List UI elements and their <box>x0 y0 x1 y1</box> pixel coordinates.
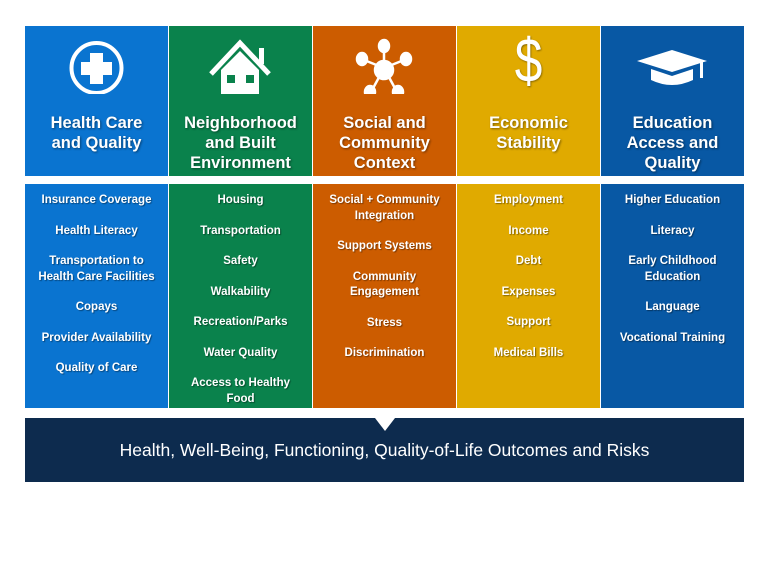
list: economic: Employment <box>494 194 563 206</box>
list: economic: Medical Bills <box>494 346 563 358</box>
title <box>489 114 570 154</box>
list: neighborhood: Access to Healthy <box>191 377 290 389</box>
list: education: Vocational Training <box>620 332 725 344</box>
list: social <box>313 184 456 408</box>
list: economic: Expenses <box>502 286 555 298</box>
list: social: Stress <box>367 316 402 328</box>
list: health care: Quality of Care <box>56 362 137 374</box>
list: health care: Insurance Coverage <box>42 194 151 206</box>
title <box>51 114 144 154</box>
title <box>339 114 432 172</box>
title: Social and <box>343 114 426 132</box>
list: education: Language <box>645 301 700 313</box>
list: social: Engagement <box>350 286 419 298</box>
title: Community <box>339 134 430 152</box>
list: health care: Transportation to <box>49 255 144 267</box>
outcome bar <box>25 418 744 482</box>
list: neighborhood: Food <box>226 392 255 404</box>
icon: network <box>356 38 412 94</box>
title: Neighborhood <box>184 114 297 132</box>
title: and Quality <box>52 134 141 152</box>
list: health care: Health Literacy <box>55 224 138 236</box>
header: social <box>313 26 456 176</box>
title <box>627 114 720 174</box>
list: social: Integration <box>355 210 414 222</box>
title: Access and <box>627 134 718 152</box>
title: Context <box>354 154 415 172</box>
list: education: Early Childhood <box>628 255 717 267</box>
list: neighborhood <box>169 184 312 408</box>
title: Stability <box>496 134 561 152</box>
list: neighborhood: Transportation <box>200 224 281 236</box>
list: neighborhood: Water Quality <box>204 346 277 358</box>
title <box>184 114 298 172</box>
list: neighborhood: Housing <box>218 194 264 206</box>
list: education: Higher Education <box>625 194 720 206</box>
icon: graduation cap <box>637 50 707 85</box>
list: education: Literacy <box>650 224 695 236</box>
arrow notch <box>375 418 395 431</box>
list: education <box>601 184 744 408</box>
list: social: Social + Community <box>329 194 440 206</box>
icon: dollar: $ <box>515 27 542 96</box>
list: economic: Support <box>506 316 551 328</box>
list: neighborhood: Walkability <box>211 286 270 298</box>
title: Health Care <box>51 114 142 132</box>
list: economic: Debt <box>516 255 541 267</box>
outcome bar: Health, Well-Being, Functioning, Quality-of-Life Outcomes and Risks <box>120 440 649 460</box>
list: social: Discrimination <box>345 347 424 359</box>
title: Education <box>633 114 712 132</box>
header: neighborhood <box>169 26 312 176</box>
list: health care: Health Care Facilities <box>38 270 155 282</box>
list: neighborhood: Safety <box>223 255 258 267</box>
header: health care <box>25 26 168 176</box>
list: health care <box>25 184 168 408</box>
title: Economic <box>489 114 568 132</box>
list: economic: Income <box>508 224 549 236</box>
icon: medical cross <box>70 41 124 94</box>
list: health care: Copays <box>76 301 117 313</box>
list: health care: Provider Availability <box>42 332 151 344</box>
list: education: Education <box>645 270 700 282</box>
list: social: Community <box>353 270 416 282</box>
title: and Built <box>205 134 276 152</box>
list: economic <box>457 184 600 408</box>
title: Environment <box>190 154 291 172</box>
list: social: Support Systems <box>337 240 432 252</box>
header: education <box>601 26 744 176</box>
title: Quality <box>645 154 700 172</box>
list: neighborhood: Recreation/Parks <box>194 316 287 328</box>
header: economic <box>457 26 600 176</box>
icon: house <box>209 40 271 94</box>
